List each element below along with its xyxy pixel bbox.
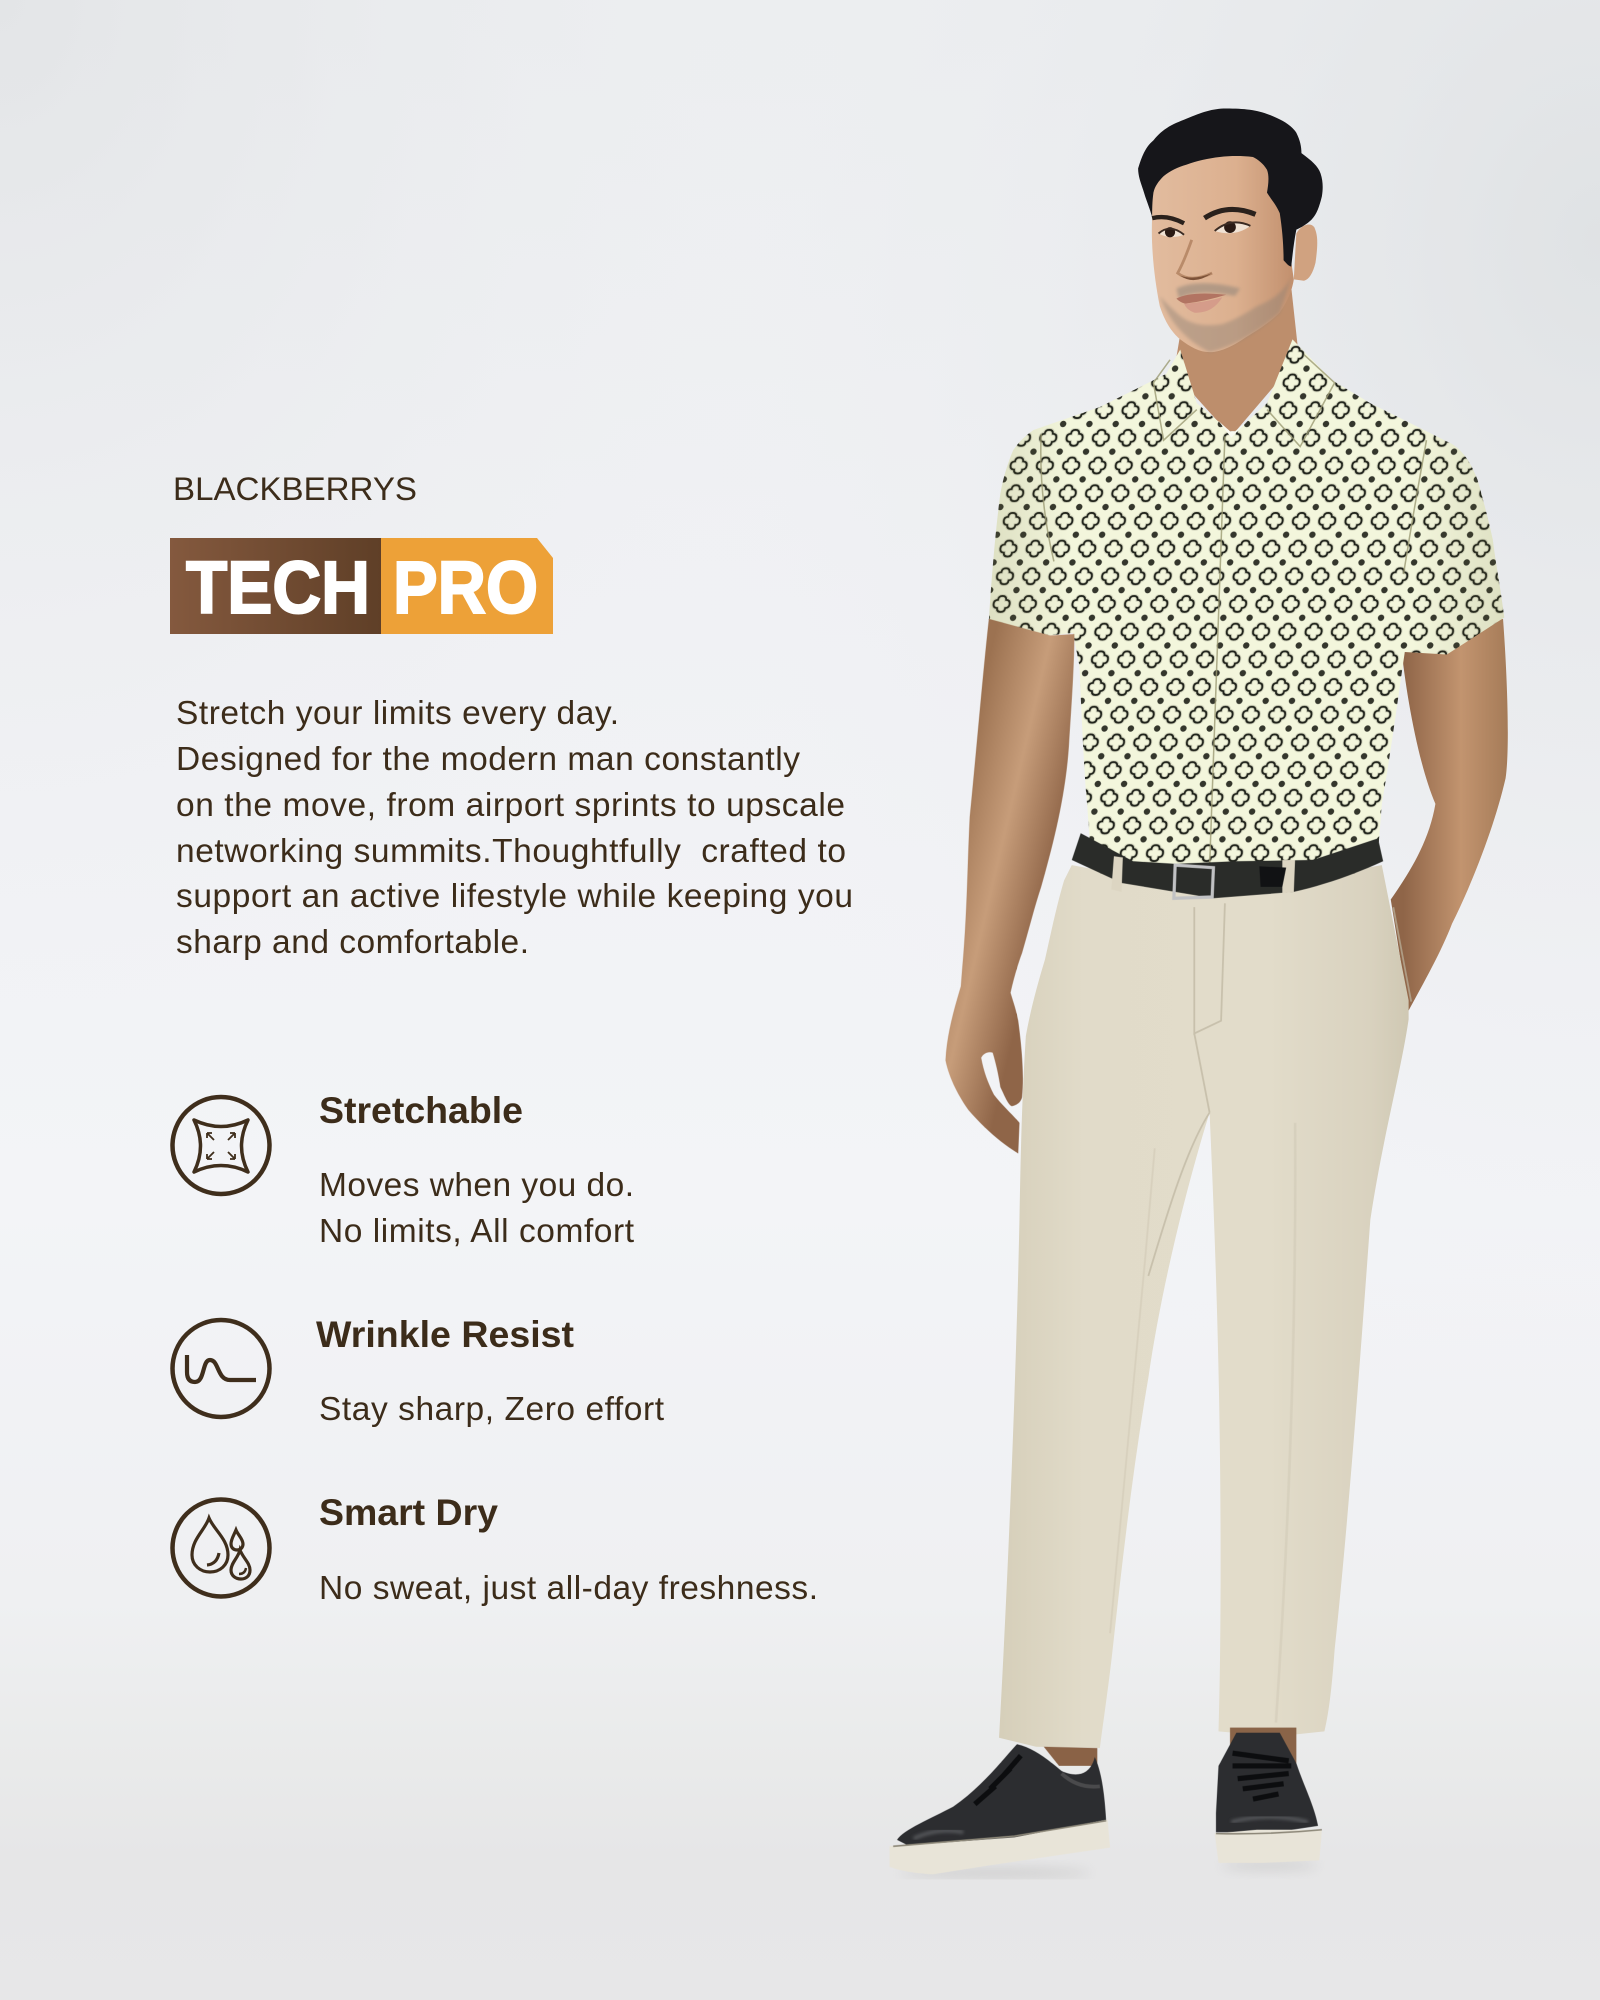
logo: Tech Pro: TECH — [186, 546, 370, 629]
feature: Wrinkle Resist — [172, 1313, 665, 1428]
floor shadows — [900, 1862, 1318, 1878]
left arm and hand — [945, 619, 1074, 1153]
intro text block: networking summits.Thoughtfully crafted to — [176, 833, 846, 870]
eyebrows — [1152, 217, 1184, 223]
trousers — [999, 865, 1411, 1748]
right arm — [1391, 619, 1508, 1011]
face — [1148, 153, 1294, 352]
hair — [1138, 108, 1323, 267]
brand name: BLACKBERRYS — [173, 471, 417, 507]
feature: Smart Dry — [172, 1491, 818, 1607]
shirt collar and placket — [1041, 355, 1426, 868]
facial features — [1152, 209, 1293, 352]
description: Stretchable — [319, 1167, 635, 1250]
left shoe — [889, 1744, 1110, 1874]
nose — [1178, 240, 1212, 278]
eyes — [1159, 229, 1184, 237]
model figure — [889, 108, 1508, 1878]
icon: water drops — [172, 1500, 270, 1596]
intro text block: support an active lifestyle while keeping you — [176, 878, 853, 915]
left ankle — [1044, 1747, 1097, 1766]
intro text block: on the move, from airport sprints to upscale — [176, 787, 845, 824]
belt — [1072, 833, 1383, 898]
open neckline — [1219, 421, 1248, 438]
icon: stretch fabric — [172, 1097, 270, 1194]
description: Wrinkle Resist: Stay sharp, Zero effort — [319, 1391, 665, 1428]
description: Smart Dry: No sweat, just all-day freshness. — [319, 1570, 818, 1607]
description: Stretchable: Moves when you do. — [319, 1167, 634, 1204]
stubble — [1160, 274, 1293, 352]
heading: Wrinkle Resist: Wrinkle Resist — [316, 1313, 574, 1355]
feature: Stretchable — [172, 1089, 635, 1250]
neck — [1174, 287, 1299, 436]
right ankle — [1230, 1728, 1296, 1763]
heading: Smart Dry: Smart Dry — [319, 1491, 498, 1533]
icon: wrinkle line — [172, 1320, 270, 1417]
description: Stretchable: No limits, All comfort — [319, 1213, 635, 1250]
logo: Tech Pro: PRO — [393, 546, 538, 629]
heading: Stretchable: Stretchable — [319, 1089, 523, 1131]
trouser folds — [1110, 903, 1411, 1722]
lips — [1176, 293, 1226, 304]
intro text block — [176, 695, 853, 961]
shirt — [989, 339, 1504, 874]
intro text block: Stretch your limits every day. — [176, 695, 619, 732]
right shoe — [1215, 1733, 1322, 1863]
logo: Tech Pro — [170, 538, 553, 634]
intro text block: sharp and comfortable. — [176, 924, 529, 961]
intro text block: Designed for the modern man constantly — [176, 741, 800, 778]
ear — [1294, 225, 1317, 281]
